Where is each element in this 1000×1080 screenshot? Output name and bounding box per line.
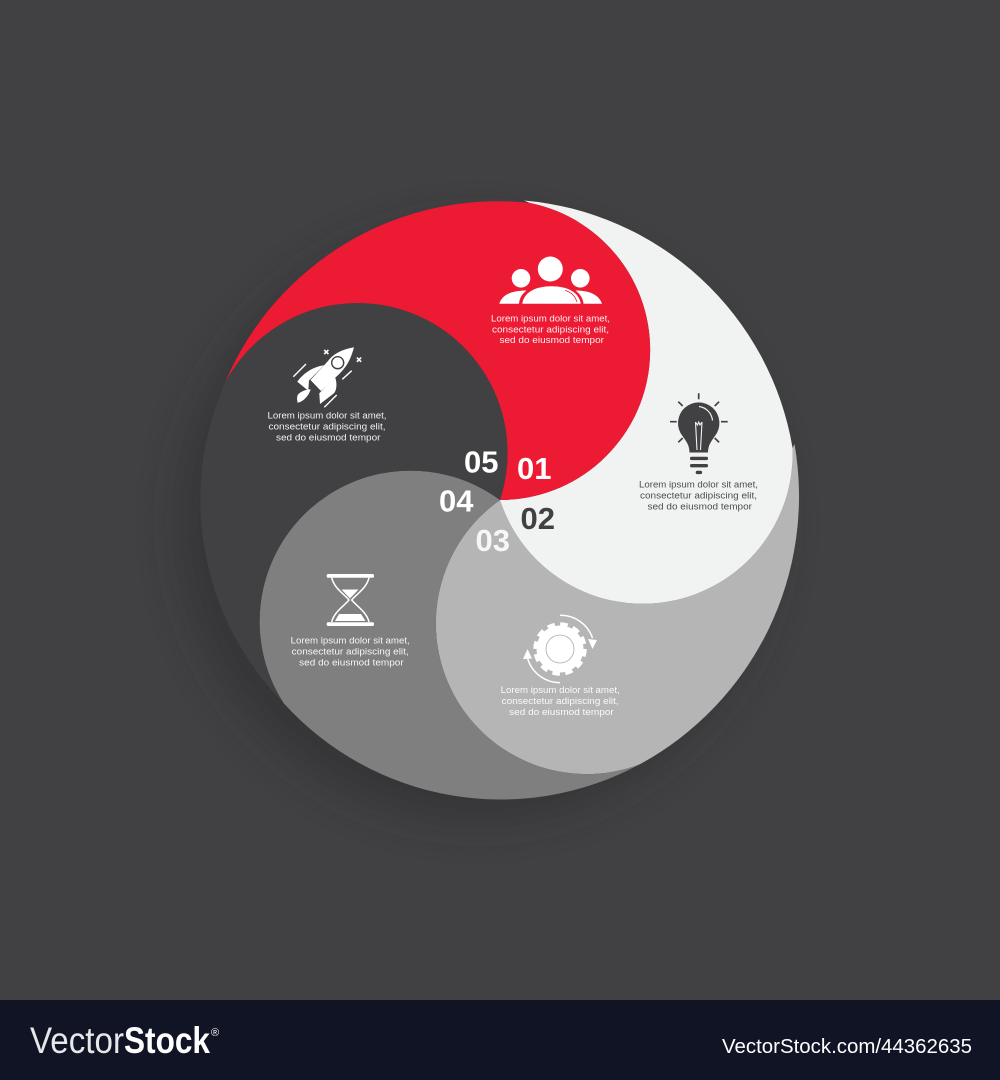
text: segment 01: consectetur adipiscing elit, (492, 324, 609, 336)
text: segment 05 (268, 410, 386, 444)
icon: gear with arrows (523, 615, 597, 683)
text: segment 02: Lorem ipsum dolor sit amet, (639, 480, 758, 490)
text: segment 05: sed do eiusmod tempor (276, 432, 381, 444)
number 01: 01 (517, 451, 551, 486)
text: segment 02: consectetur adipiscing elit, (640, 490, 757, 502)
text: segment 03: Lorem ipsum dolor sit amet, (501, 685, 620, 696)
number 04: 04 (439, 484, 474, 518)
text: segment 02: sed do eiusmod tempor (648, 502, 753, 512)
panel: segment 01 (225, 201, 650, 500)
swirl chart (200, 200, 799, 800)
footer logo: Stock (124, 1020, 210, 1061)
text: segment 03 (501, 685, 620, 718)
text: segment 01 (491, 314, 610, 346)
icon: people (499, 256, 602, 304)
text: segment 01: Lorem ipsum dolor sit amet, (491, 314, 610, 324)
text: segment 04 (291, 636, 410, 668)
footer logo (30, 1020, 219, 1061)
panel: segment 02 (500, 200, 793, 604)
icon: light bulb (670, 393, 728, 474)
footer logo: ® (211, 1027, 219, 1039)
footer image id: VectorStock.com/44362635 (722, 1036, 972, 1058)
footer bar (0, 1000, 1000, 1080)
number 05: 05 (464, 444, 498, 480)
text: segment 05: Lorem ipsum dolor sit amet, (268, 410, 386, 422)
footer logo: Vector (30, 1020, 124, 1061)
panel: segment 05 (200, 303, 508, 703)
number 03: 03 (476, 523, 510, 558)
text: segment 04: Lorem ipsum dolor sit amet, (291, 636, 410, 646)
drop shadow (180, 224, 776, 820)
number 02: 02 (520, 501, 555, 536)
text: segment 04: sed do eiusmod tempor (299, 658, 405, 668)
text: segment 05: consectetur adipiscing elit, (268, 422, 386, 432)
text: segment 03: sed do eiusmod tempor (509, 707, 615, 718)
text: segment 02 (639, 480, 758, 512)
text: segment 04: consectetur adipiscing elit, (292, 646, 409, 658)
text: segment 03: consectetur adipiscing elit, (502, 696, 619, 707)
icon: hourglass (327, 574, 374, 626)
text: segment 01: sed do eiusmod tempor (500, 335, 605, 346)
panel: segment 04 (260, 471, 639, 800)
panel: segment 03 (436, 444, 799, 774)
icon: rocket (293, 347, 361, 407)
